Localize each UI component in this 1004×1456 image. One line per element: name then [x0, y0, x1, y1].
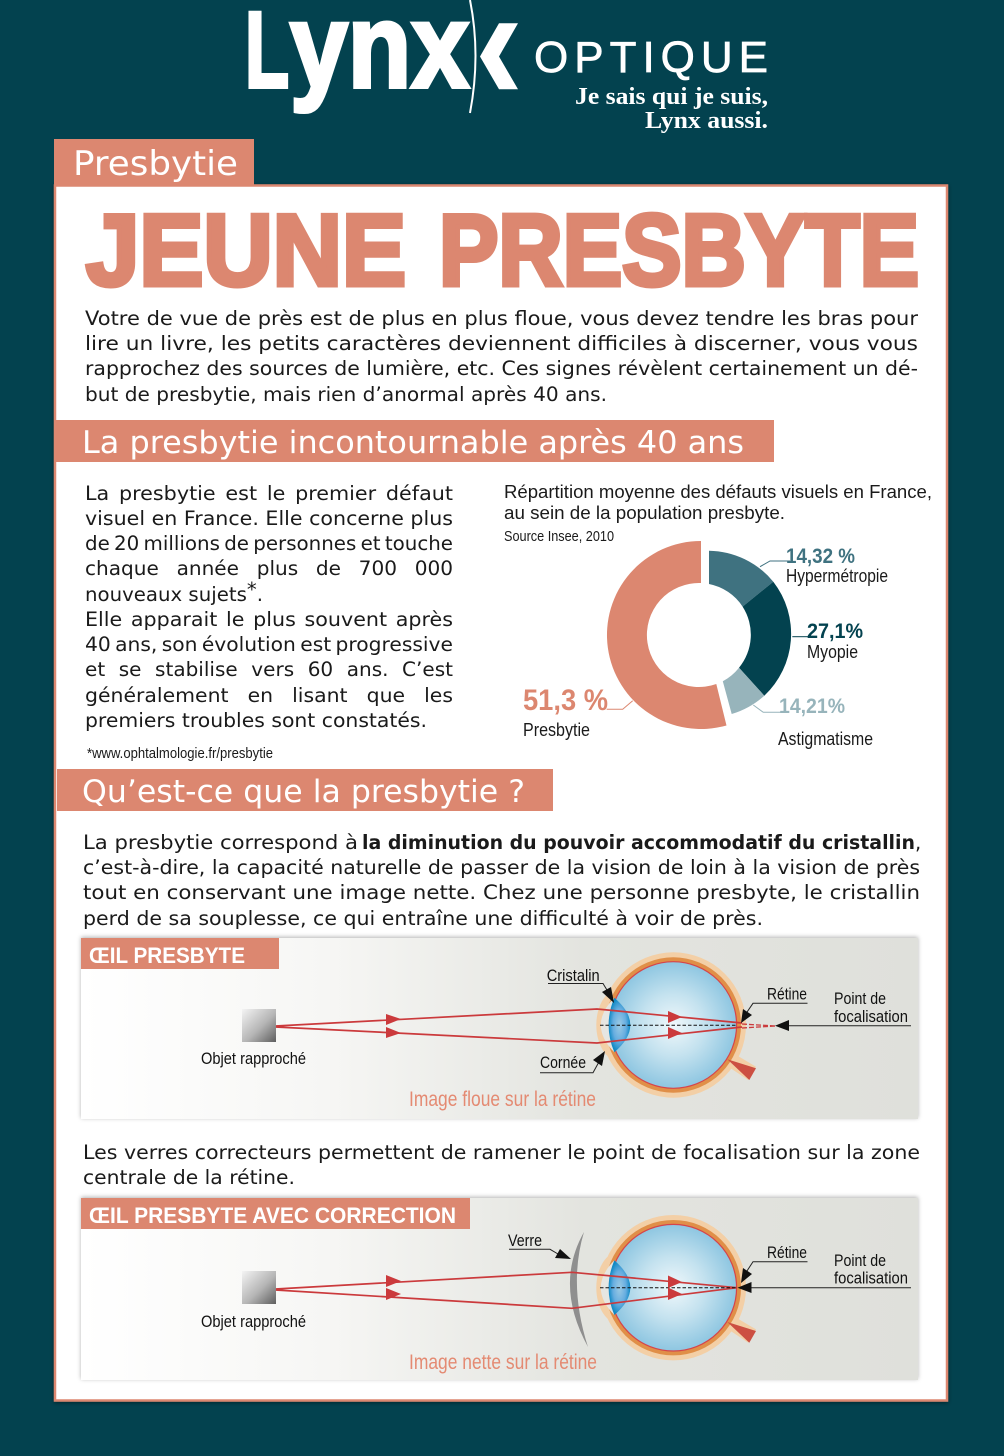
caption: Image floue sur la rétine [409, 1088, 596, 1111]
diagram: oeil presbyte avec correction [81, 1198, 918, 1380]
label: point de focalisation: Point de [834, 989, 886, 1008]
main white panel [55, 186, 947, 1400]
correction paragraph: centrale de la rétine. [83, 1166, 295, 1189]
chart title [504, 482, 932, 545]
segment: presbytie [607, 541, 726, 729]
eye [596, 952, 756, 1098]
definition paragraph [83, 831, 921, 930]
object label: Objet rapproché [201, 1312, 306, 1331]
section heading: qu'est-ce que: Qu’est-ce que la presbytie ? [82, 774, 525, 810]
intro paragraph: Votre de vue de près est de plus en plus floue, vous devez tendre les bras pour [85, 307, 919, 330]
correction paragraph [83, 1141, 920, 1189]
definition paragraph: tout en conservant une image nette. Chez une personne presbyte, le cristallin [83, 881, 920, 904]
left text column: premiers troubles sont constatés. [85, 709, 427, 732]
label: point de focalisation: Point de [834, 1251, 886, 1270]
label: astigmatisme: Astigmatisme [778, 729, 873, 749]
section heading: incontournable: La presbytie incontournable après 40 ans [82, 425, 744, 461]
label: rétine: Rétine [767, 1243, 807, 1262]
label: rétine: Rétine [767, 984, 807, 1004]
label: cornée: Cornée [540, 1053, 586, 1072]
label: rétine [741, 1243, 808, 1283]
label: point de focalisation [775, 989, 911, 1031]
title: PRESBYTE [439, 195, 919, 307]
label: cristalin: Cristalin [547, 966, 600, 985]
label: astigmatisme: 14,21% [779, 695, 845, 718]
label: verre [508, 1231, 571, 1259]
intro paragraph: but de presbytie, mais rien d’anormal après 40 ans. [85, 383, 607, 406]
definition paragraph: la diminution du pouvoir accommodatif du cristallin [362, 831, 915, 854]
definition paragraph: c’est-à-dire, la capacité naturelle de passer de la vision de loin à la vision de près [83, 856, 920, 879]
label: point de focalisation [738, 1251, 911, 1293]
label: verre: Verre [508, 1231, 542, 1250]
left text column: Elle apparait le plus souvent après [85, 608, 453, 631]
intro paragraph: lire un livre, les petits caractères deviennent difficiles à discerner, vous vous [85, 332, 918, 355]
label: cristalin [547, 966, 614, 1003]
left text column: chaque année plus de 700 000 [85, 557, 453, 580]
diagram tab [81, 938, 279, 969]
left text column: visuel en France. Elle concerne plus [85, 507, 453, 530]
eye [596, 1215, 756, 1360]
caption: Image nette sur la rétine [409, 1351, 597, 1374]
correction paragraph: Les verres correcteurs permettent de ramener le point de focalisation sur la zone [83, 1141, 920, 1164]
chart title: Répartition moyenne des défauts visuels en France, [504, 482, 932, 502]
left text column: généralement en lisant que les [85, 684, 453, 707]
donut chart [523, 541, 888, 749]
label: point de focalisation: focalisation [834, 1268, 908, 1288]
definition paragraph: La presbytie correspond à [83, 831, 358, 854]
label: presbytie: Presbytie [523, 720, 590, 740]
intro paragraph [85, 307, 919, 406]
label: astigmatisme [778, 695, 873, 749]
left text column: nouveaux sujets [85, 583, 245, 606]
logo: Lynx aussi. [645, 108, 768, 134]
segment: hypermétropie [709, 551, 773, 607]
object cube [242, 1271, 276, 1304]
label: point de focalisation: focalisation [834, 1007, 908, 1026]
object label: Objet rapproché [201, 1049, 306, 1068]
tab: Presbytie: Presbytie [73, 144, 238, 184]
logo: Je sais qui je suis, [575, 84, 768, 110]
title [86, 195, 919, 307]
logo [245, 0, 768, 134]
diagram tab: ŒIL PRESBYTE [89, 943, 245, 968]
left text column: de 20 millions de personnes et touche [85, 532, 453, 555]
label: myopie [807, 620, 863, 662]
label: hypermétropie: 14,32 % [786, 545, 855, 568]
chart title: au sein de la population presbyte. [504, 503, 785, 523]
footnote: *www.ophtalmologie.fr/presbytie [87, 745, 273, 762]
segment: astigmatisme [723, 668, 764, 714]
left text column: * [247, 578, 257, 601]
segment: myopie [739, 582, 791, 696]
left text column: La presbytie est le premier défaut [85, 482, 453, 505]
chart title: Source Insee, 2010 [504, 528, 614, 545]
left text column: . [257, 583, 263, 606]
left text column: et se stabilise vers 60 ans. C’est [85, 658, 453, 681]
light rays [276, 1009, 775, 1043]
label: hypermétropie: Hypermétropie [786, 566, 888, 586]
label: rétine [741, 984, 808, 1023]
tab: Presbytie [54, 139, 254, 185]
label: myopie: 27,1% [807, 620, 863, 643]
left text column [85, 482, 453, 732]
label: presbytie: 51,3 % [523, 684, 608, 717]
intro paragraph: rapprochez des sources de lumière, etc. Ces signes révèlent certainement un dé- [85, 357, 918, 380]
light rays [276, 1272, 737, 1308]
definition paragraph: perd de sa souplesse, ce qui entraîne une difficulté à voir de près. [83, 907, 763, 930]
definition paragraph: , [915, 831, 921, 854]
left text column: 40 ans, son évolution est progressive [85, 633, 453, 656]
diagram tab: ŒIL PRESBYTE AVEC CORRECTION [89, 1203, 456, 1228]
label: myopie: Myopie [807, 642, 858, 662]
corrective lens [570, 1232, 588, 1347]
object cube [242, 1009, 276, 1042]
diagram: oeil presbyte [81, 938, 918, 1119]
logo: OPTIQUE [534, 33, 768, 82]
title: JEUNE [86, 195, 406, 307]
label: presbytie [523, 684, 608, 740]
label: hypermétropie [786, 545, 888, 586]
